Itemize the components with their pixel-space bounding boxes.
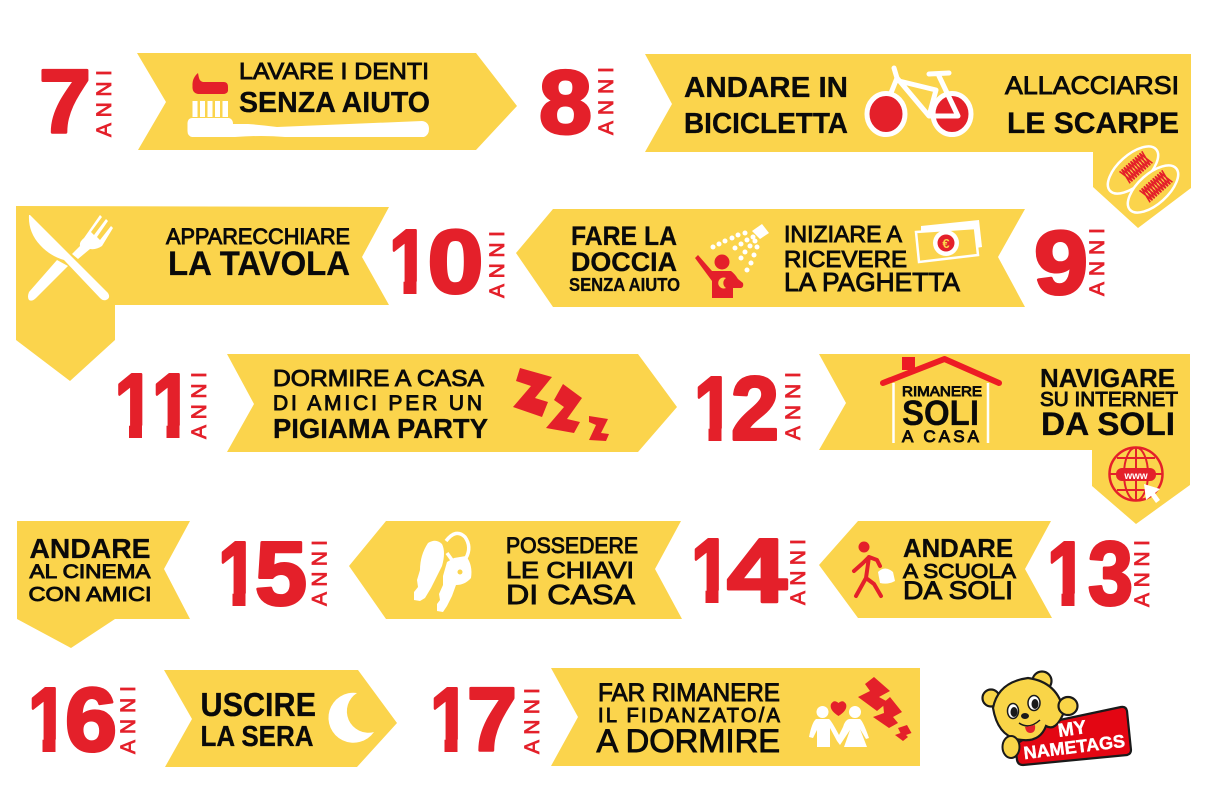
sign text: MY [1057,717,1088,742]
panel: doccia e paghetta: LA PAGHETTA [784,267,961,297]
age 14 label: 4 [727,522,787,622]
age 16 label: 6 [65,670,117,770]
panel: apparecchiare la tavola [16,206,389,381]
icon: keys [414,533,471,612]
panel: far rimanere il fidanzato: A DORMIRE [596,723,780,759]
panel: chiavi di casa: DI CASA [506,579,635,610]
icon: zzz [513,368,609,441]
panel: uscire la sera [164,670,397,767]
age 12 label: ANNI [782,372,805,440]
panel: doccia e paghetta: SENZA AIUTO [569,275,680,295]
age 7 label: ANNI [93,70,116,137]
age 14 label [694,538,806,606]
panel: pigiama party: DI AMICI PER UN [273,392,482,415]
panel: bicicletta e scarpe: ALLACCIARSI [1005,72,1179,100]
icon: house [883,357,999,443]
panel: doccia e paghetta: FARE LA [571,221,677,251]
age 17 label [434,686,540,754]
panel: bicicletta e scarpe: BICICLETTA [684,108,848,140]
panel: doccia e paghetta [516,209,1025,307]
panel: doccia e paghetta: INIZIARE A [784,221,903,247]
sign text: NAMETAGS [1022,731,1126,763]
panel: apparecchiare la tavola: LA TAVOLA [168,245,350,283]
panel: bicicletta e scarpe [645,54,1191,228]
panel: andare a scuola [819,521,1052,618]
age 16 label: ANNI [117,686,140,754]
panel: andare al cinema [17,521,190,648]
icon: globe: www [1123,471,1148,482]
icon: couple with heart [809,677,912,747]
panel: rimanere soli e internet: SU INTERNET [1040,389,1178,411]
panel: lavare i denti: LAVARE I DENTI [239,58,429,84]
bear ears and head [982,672,1078,740]
panel: lavare i denti: SENZA AIUTO [239,87,430,119]
icon: banknotes [916,220,982,262]
age 9 label [1034,214,1109,314]
icon: shower [695,224,769,298]
panel: lavare i denti [137,53,517,150]
age 13 label: 1 [1047,524,1087,624]
age 11 label: ANNI [188,372,211,439]
age 11 label [118,373,206,440]
panel: andare a scuola: ANDARE [903,533,1013,563]
panel: far rimanere il fidanzato: FAR RIMANERE [598,679,780,707]
age 17 label: 7 [467,670,517,770]
panel: uscire la sera: USCIRE [200,686,316,723]
age 10 label: ANNI [486,231,509,298]
panel: rimanere soli e internet: NAVIGARE [1040,363,1175,393]
icon: bicycle [867,68,971,134]
age 7 label [39,52,116,152]
panel: rimanere soli e internet: A CASA [902,427,980,446]
age 11 label: 1 [152,356,192,456]
age 17 label: ANNI [521,688,544,754]
panel: apparecchiare la tavola: APPARECCHIARE [166,224,350,249]
panel: andare a scuola: A SCUOLA [903,561,1017,583]
panel: chiavi di casa: LE CHIAVI [506,557,634,583]
panel: andare al cinema: AL CINEMA [30,562,151,583]
age 7 label: 7 [39,52,91,152]
panel: rimanere soli e internet: DA SOLI [1041,406,1175,442]
panel: andare al cinema: CON AMICI [28,584,152,606]
age 14 label: 1 [691,522,731,622]
panel: far rimanere il fidanzato: IL FIDANZATO/A [598,705,781,727]
panel: andare a scuola: DA SOLI [903,577,1013,605]
icon: shoes [1100,138,1186,221]
logo: my nametags bear [982,672,1131,765]
age 13 label: ANNI [1131,540,1154,607]
age 10 label: 0 [428,212,484,312]
icon: knife and fork [28,215,113,301]
sign [1015,707,1131,765]
panel: bicicletta e scarpe: LE SCARPE [1007,107,1179,140]
age 9 label: 9 [1034,214,1088,314]
age 10 label: 1 [389,212,429,312]
panel: rimanere soli e internet [819,354,1190,524]
age 17 label: 1 [430,670,470,770]
panel: rimanere soli e internet: RIMANERE [902,383,982,399]
panel: chiavi di casa: POSSEDERE [506,533,638,558]
icon: walking child with bag [854,542,895,596]
icon: banknotes: € [942,236,950,251]
age 8 label: 8 [539,53,592,153]
panel: bicicletta e scarpe: ANDARE IN [684,72,848,104]
icon: toothbrush [188,73,429,137]
age 12 label: 2 [731,360,779,460]
panel: rimanere soli e internet: SOLI [902,394,979,433]
age 13 label [1050,540,1150,608]
age 8 label: ANNI [595,67,618,135]
panel: far rimanere il fidanzato [551,668,920,766]
age 15 label [222,541,327,607]
panel: doccia e paghetta: RICEVERE [784,246,907,272]
panel: doccia e paghetta: DOCCIA [571,247,677,277]
bear face [1008,696,1040,733]
age 16 label: 1 [28,670,68,770]
age 10 label [392,228,504,298]
age 11 label: 1 [114,356,154,456]
age 15 label: 5 [255,524,307,624]
panel: pigiama party [227,354,677,452]
age 16 label [32,686,136,754]
sign text [1022,717,1126,763]
panel: pigiama party: PIGIAMA PARTY [273,413,488,444]
age 15 label: ANNI [308,540,332,606]
age 12 label: 1 [694,360,734,460]
panel: pigiama party: DORMIRE A CASA [273,365,485,391]
panel: chiavi di casa [349,521,682,619]
age 12 label [698,374,800,441]
icon: moon [328,693,374,743]
age 15 label: 1 [218,524,258,624]
icon: globe [1110,448,1162,503]
bear paw [1002,736,1020,758]
age 13 label: 3 [1088,524,1133,624]
panel: andare al cinema: ANDARE [30,533,150,564]
age 8 label [539,53,618,153]
panel: uscire la sera: LA SERA [200,721,314,753]
age 14 label: ANNI [787,539,810,605]
age 9 label: ANNI [1086,228,1109,296]
